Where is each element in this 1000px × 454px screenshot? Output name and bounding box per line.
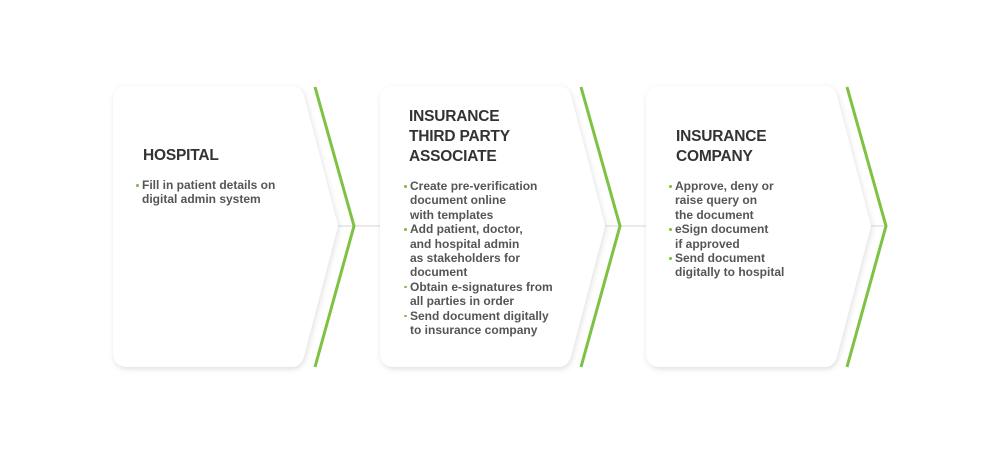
arrow: green chevron 2 bbox=[581, 87, 620, 367]
bullets: insurance company: the document bbox=[675, 208, 754, 222]
bullets: hospital bbox=[136, 178, 275, 206]
bullets: hospital: digital admin system bbox=[142, 192, 261, 206]
heading: third party bbox=[409, 108, 510, 165]
text: insurance company bbox=[669, 128, 784, 279]
card: insurance company bbox=[646, 86, 871, 367]
heading: third party: INSURANCE bbox=[409, 108, 499, 125]
bullets: third party bbox=[404, 179, 553, 337]
bullets: insurance company bbox=[669, 179, 784, 279]
bullets: insurance company: Send document bbox=[675, 251, 765, 265]
bullets: insurance company: eSign document bbox=[675, 222, 768, 236]
bullets: third party: all parties in order bbox=[410, 294, 514, 308]
arrow: green chevron 3 bbox=[847, 87, 886, 367]
bullets: third party: Send document digitally bbox=[410, 309, 549, 323]
heading: insurance company: INSURANCE bbox=[676, 128, 766, 145]
heading: third party: ASSOCIATE bbox=[409, 148, 496, 165]
bullets: third party: Add patient, doctor, bbox=[410, 222, 523, 236]
bullets: third party: to insurance company bbox=[410, 323, 537, 337]
bullets: insurance company: if approved bbox=[675, 237, 740, 251]
bullets: third party: document online bbox=[410, 193, 506, 207]
bullets: third party: Create pre-verification bbox=[410, 179, 537, 193]
text: third party bbox=[404, 108, 553, 337]
arrow: green chevron 1 bbox=[315, 87, 354, 367]
bullets: third party: with templates bbox=[410, 208, 493, 222]
heading: third party: THIRD PARTY bbox=[409, 128, 510, 145]
card: insurance third party bbox=[380, 86, 605, 367]
heading: hospital: HOSPITAL bbox=[143, 147, 219, 164]
bullets: insurance company: raise query on bbox=[675, 193, 757, 207]
heading: insurance company: COMPANY bbox=[676, 148, 753, 165]
heading: insurance company bbox=[676, 128, 766, 165]
bullets: insurance company: digitally to hospital bbox=[675, 265, 784, 279]
text: hospital bbox=[136, 147, 275, 206]
bullets: third party: and hospital admin bbox=[410, 237, 519, 251]
bullets: hospital: Fill in patient details on bbox=[142, 178, 275, 192]
bullets: third party: as stakeholders for bbox=[410, 251, 520, 265]
card: hospital bbox=[113, 86, 338, 367]
bullets: insurance company: Approve, deny or bbox=[675, 179, 774, 193]
bullets: third party: document bbox=[410, 265, 467, 279]
bullets: third party: Obtain e-signatures from bbox=[410, 280, 553, 294]
